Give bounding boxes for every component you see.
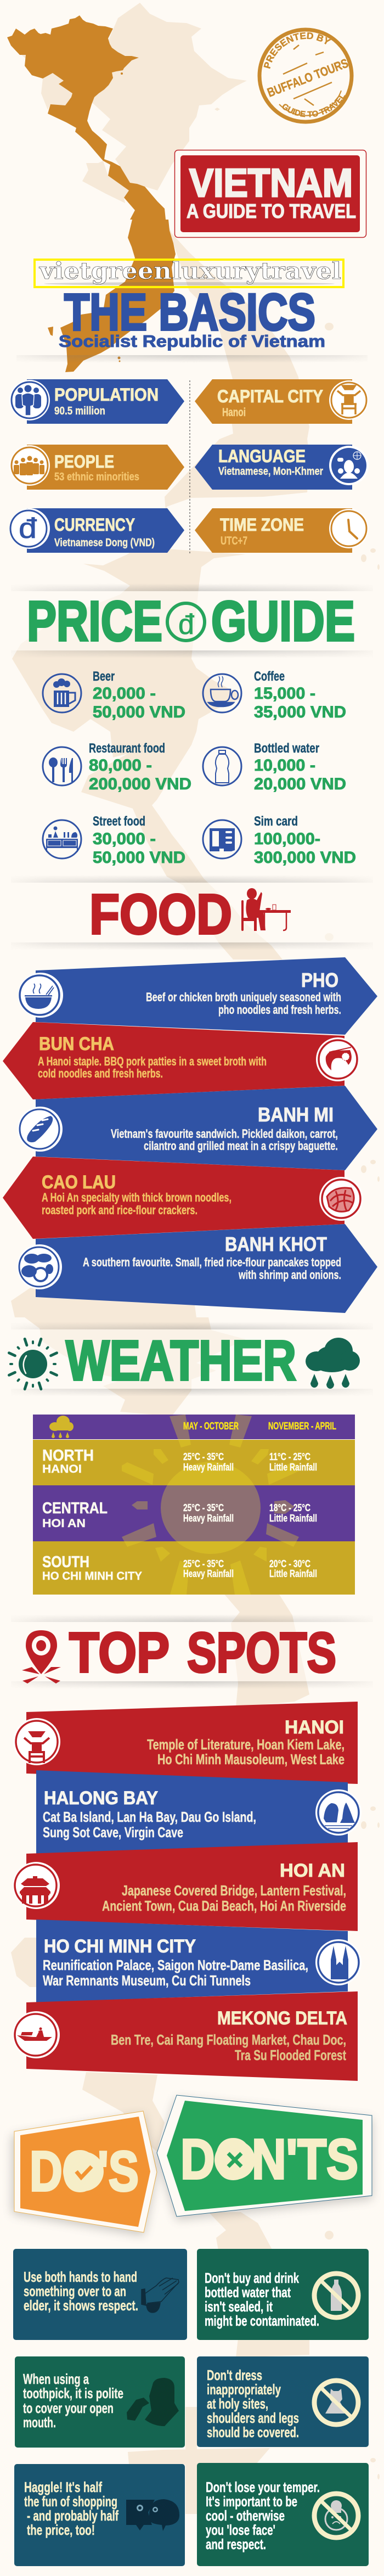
food panel: cao lau: A Hoi An specialty with thick brown noodles,	[42, 1191, 231, 1204]
icon: limestone islands	[324, 1803, 355, 1828]
icon: water bottle	[216, 750, 229, 783]
icon: cutlery	[49, 757, 73, 782]
weather table	[33, 1415, 355, 1595]
stamp: presented by Buffalo Tours: GUIDE TO TRAVEL	[283, 95, 346, 117]
icon: japanese bridge pagoda	[20, 1876, 50, 1904]
weather table: HANOI	[42, 1463, 82, 1475]
heading: the basics: Socialist Republic of Vietnam	[59, 332, 325, 351]
card: temper: cool - otherwise	[206, 2507, 285, 2524]
icon: praying hands	[142, 2278, 179, 2313]
heading band: food	[19, 876, 365, 949]
food panel: bun cha: A Hanoi staple. BBQ pork patties in a sweet broth with	[38, 1054, 267, 1068]
weather table: Little Rainfall	[269, 1568, 317, 1579]
weather table: NORTH	[42, 1447, 94, 1464]
panel: currency: Vietnamese Dong (VND)	[54, 537, 155, 549]
weather table: HOI AN	[42, 1517, 86, 1530]
price: beer: 50,000 VND	[93, 703, 185, 721]
card: temper: Don't lose your temper.	[206, 2479, 320, 2495]
icon: temple gate	[24, 1732, 49, 1763]
price: restaurant food: 200,000 VND	[89, 775, 191, 793]
panel: people	[9, 445, 184, 490]
panel: language	[195, 445, 369, 490]
heading band: price guide	[17, 585, 365, 656]
icon: x mark	[228, 2153, 241, 2167]
icon: beer mug	[53, 678, 75, 707]
panel: people: 53 ethnic minorities	[54, 471, 139, 483]
icon: speakers and globe	[337, 452, 361, 479]
weather table: Little Rainfall	[269, 1513, 317, 1524]
price: restaurant food: Restaurant food	[89, 741, 165, 756]
icon: sun	[9, 1339, 57, 1389]
price: bottled water: 20,000 VND	[254, 775, 346, 793]
weather table: Heavy Rainfall	[183, 1568, 234, 1579]
heading band: weather	[8, 1323, 365, 1395]
weather table: Heavy Rainfall	[183, 1462, 234, 1473]
card: bottled water	[197, 2249, 369, 2340]
icon: temple gate	[337, 386, 360, 414]
icon: bun cha dish	[326, 1047, 352, 1070]
card: dress code: Don't dress	[207, 2367, 262, 2383]
price: sim card: 100,000-	[254, 830, 320, 848]
weather table: 25°C - 35°C	[183, 1502, 224, 1513]
spot panel: ho chi minh city	[36, 1920, 362, 2002]
heading: the basics: THE BASICS	[64, 283, 315, 341]
heading band: food: FOOD	[89, 883, 232, 946]
weather table: Heavy Rainfall	[183, 1513, 234, 1524]
icon: pancakes	[21, 1254, 53, 1281]
panel: time zone: TIME ZONE	[220, 515, 304, 535]
food panel: pho	[18, 957, 377, 1035]
icon: speech bubbles	[126, 2499, 179, 2531]
stamp: presented by Buffalo Tours: BUFFALO TOURS	[265, 55, 350, 100]
icon: dong symbol: đ	[19, 513, 37, 545]
panel: language: LANGUAGE	[218, 446, 306, 466]
weather table: HO CHI MINH CITY	[42, 1570, 142, 1582]
card: bottled water: isn't sealed, it	[205, 2298, 273, 2315]
price: coffee: Coffee	[254, 669, 285, 684]
icon: check mark	[76, 2167, 92, 2177]
spot panel: mekong delta: MEKONG DELTA	[217, 2008, 347, 2029]
heading band: price guide: đ	[178, 609, 194, 641]
weather table: NOVEMBER - APRIL	[268, 1421, 336, 1432]
panel: language: Vietnamese, Mon-Khmer	[218, 465, 323, 478]
price: coffee: 35,000 VND	[254, 703, 346, 721]
card: temper: you 'lose face'	[206, 2522, 275, 2538]
food panel: cao lau: CAO LAU	[42, 1172, 116, 1193]
icon: noodle bowl illustration	[327, 1188, 354, 1211]
card: dress code: inappropriately	[207, 2381, 281, 2398]
card: toothpick: toothpick, it is polite	[23, 2385, 123, 2401]
panel: do's sign	[12, 2111, 157, 2236]
spot panel: hanoi: HANOI	[285, 1717, 344, 1738]
price: coffee: 15,000 -	[254, 684, 315, 703]
food panel: pho: pho noodles and fresh herbs.	[218, 1003, 341, 1017]
card: toothpick	[15, 2356, 185, 2448]
card: haggle: - and probably half	[27, 2507, 118, 2524]
card: both hands: something over to an	[24, 2283, 126, 2299]
price: street food: 30,000 -	[93, 830, 156, 848]
icon: clock	[348, 520, 357, 538]
price: bottled water: Bottled water	[254, 741, 319, 756]
food panel: banh mi	[18, 1086, 377, 1170]
card: temper: It's important to be	[206, 2493, 297, 2510]
stamp: presented by Buffalo Tours	[258, 27, 353, 124]
heading band: top spots	[19, 1616, 365, 1687]
weather table: SOUTH	[42, 1553, 89, 1571]
card: toothpick: to cover your open	[23, 2400, 114, 2416]
card: bottled water: Don't buy and drink	[205, 2270, 299, 2286]
food panel: cao lau: roasted pork and rice-flour crackers.	[42, 1203, 197, 1217]
spot panel: ho chi minh city: War Remnants Museum, Cu Chi Tunnels	[43, 1972, 251, 1989]
price: street food: Street food	[93, 814, 145, 829]
islands of Vietnam	[48, 72, 123, 362]
weather table: 20°C - 30°C	[269, 1558, 310, 1569]
price: sim card: Sim card	[254, 814, 298, 829]
price: sim card	[203, 814, 356, 867]
card: both hands: elder, it shows respect.	[24, 2297, 138, 2314]
heading band: weather: WEATHER	[66, 1329, 296, 1392]
spot panel: halong bay: Sung Sot Cave, Virgin Cave	[43, 1824, 183, 1840]
price: beer	[43, 669, 185, 721]
food panel: bun cha	[3, 1022, 360, 1099]
card: haggle: the price, too!	[27, 2522, 95, 2538]
price: bottled water: 10,000 -	[254, 756, 315, 775]
panel: currency	[9, 508, 184, 553]
icon: person with toothpick	[127, 2378, 179, 2426]
panel: population: 90.5 million	[54, 405, 105, 417]
title sign	[174, 150, 366, 237]
icon: noodle bowl	[25, 984, 54, 1009]
icon: sim card	[210, 828, 235, 851]
spot panel: halong bay: HALONG BAY	[44, 1788, 158, 1809]
spot panel: halong bay: Cat Ba Island, Lan Ha Bay, Dau Go Island,	[43, 1809, 256, 1825]
watermark label box: vietgreenluxurytravel	[39, 257, 341, 284]
card: both hands: Use both hands to hand	[24, 2269, 137, 2285]
card: dress code: shoulders and legs	[207, 2410, 299, 2426]
card: dress code: should be covered.	[207, 2424, 299, 2440]
panel: capital city: Hanoi	[222, 406, 246, 419]
card: bottled water: might be contaminated.	[205, 2313, 319, 2329]
panel: population	[9, 379, 184, 424]
weather table: 25°C - 35°C	[183, 1451, 224, 1462]
panel: capital city	[195, 379, 369, 424]
food panel: pho: PHO	[301, 969, 338, 991]
icon: river boat	[17, 2028, 52, 2041]
card: dress code	[197, 2356, 369, 2447]
icon: coffee cup	[208, 676, 238, 706]
icon: five people	[14, 456, 44, 475]
card: both hands	[13, 2249, 187, 2340]
heading: the basics	[19, 292, 365, 361]
panel: currency: CURRENCY	[54, 515, 135, 535]
spot panel: mekong delta: Tra Su Flooded Forest	[235, 2047, 346, 2063]
spot panel: mekong delta	[13, 1991, 358, 2081]
icon: location pin	[22, 1630, 61, 1683]
icon: street stall	[46, 827, 78, 852]
panel: time zone	[195, 508, 369, 553]
icon: person at table	[241, 888, 291, 931]
price: beer: Beer	[93, 669, 115, 684]
spot panel: halong bay	[36, 1770, 362, 1854]
card: haggle: the fun of shopping	[24, 2493, 117, 2510]
panel: do's sign: DO'S	[30, 2140, 139, 2203]
weather table: Little Rainfall	[269, 1462, 317, 1473]
icon: no bottle	[314, 2274, 358, 2317]
spot panel: hanoi	[13, 1702, 358, 1784]
icon: rain cloud	[306, 1338, 360, 1389]
spot panel: ho chi minh city: HO CHI MINH CITY	[44, 1936, 196, 1957]
food panel: bun cha: cold noodles and fresh herbs.	[38, 1067, 163, 1080]
icon: no revealing dress	[314, 2381, 358, 2425]
spot panel: hoi an: HOI AN	[280, 1860, 345, 1881]
food panel: banh mi: BANH MI	[258, 1103, 334, 1126]
divider between basics	[189, 380, 190, 553]
panel: capital city: CAPITAL CITY	[217, 386, 323, 406]
food panel: banh khot	[17, 1224, 377, 1313]
spot panel: ho chi minh city: Reunification Palace, Saigon Notre-Dame Basilica,	[43, 1957, 308, 1973]
icon: dong coin	[167, 603, 205, 641]
heading band: top spots: SPOTS	[187, 1621, 336, 1684]
price: restaurant food: 80,000 -	[89, 756, 152, 775]
price: street food	[43, 814, 185, 867]
panel: time zone: UTC+7	[221, 535, 247, 547]
weather table: CENTRAL	[42, 1500, 108, 1517]
weather table: MAY - OCTOBER	[183, 1421, 239, 1432]
panel: people: PEOPLE	[54, 452, 114, 472]
price: restaurant food	[43, 741, 191, 793]
card: haggle	[14, 2464, 185, 2566]
title sign: VIETNAM	[189, 161, 353, 205]
food panel: banh khot: BANH KHOT	[225, 1233, 327, 1255]
icon: cathedral	[331, 1946, 348, 1979]
food panel: cao lau	[3, 1157, 363, 1239]
weather table: 18°C - 25°C	[269, 1502, 310, 1513]
panel: don'ts sign	[157, 2095, 372, 2220]
weather table: 11°C - 25°C	[269, 1451, 310, 1462]
weather table: 25°C - 35°C	[183, 1558, 224, 1569]
title sign: A GUIDE TO TRAVEL	[187, 200, 356, 222]
card: toothpick: mouth.	[23, 2414, 56, 2431]
heading band: price guide: PRICE	[27, 590, 162, 653]
spot panel: hoi an	[13, 1842, 358, 1931]
sun watermark	[122, 1415, 299, 1595]
price: sim card: 300,000 VND	[254, 849, 356, 867]
icon: group of people	[15, 385, 41, 416]
price: coffee	[203, 669, 346, 721]
price: street food: 50,000 VND	[93, 849, 185, 867]
price: bottled water	[203, 741, 346, 793]
icon: baguette	[27, 1116, 53, 1142]
card: toothpick: When using a	[23, 2371, 89, 2387]
food panel: banh khot: with shrimp and onions.	[238, 1268, 341, 1282]
icon: no angry face	[314, 2494, 358, 2538]
food panel: bun cha: BUN CHA	[39, 1034, 114, 1054]
price: beer: 20,000 -	[93, 684, 156, 703]
heading band: top spots: TOP	[69, 1621, 170, 1684]
card: temper	[197, 2463, 369, 2566]
panel: population: POPULATION	[54, 385, 159, 405]
card: temper: and respect.	[206, 2536, 266, 2552]
map of Vietnam	[7, 15, 176, 372]
card: bottled water: bottled water that	[205, 2284, 291, 2300]
card: dress code: at holy sites,	[207, 2395, 268, 2412]
card: haggle: Haggle! It's half	[24, 2479, 102, 2495]
stamp: presented by Buffalo Tours: PRESENTED BY	[263, 32, 331, 69]
icon: mini rain cloud	[49, 1416, 74, 1438]
